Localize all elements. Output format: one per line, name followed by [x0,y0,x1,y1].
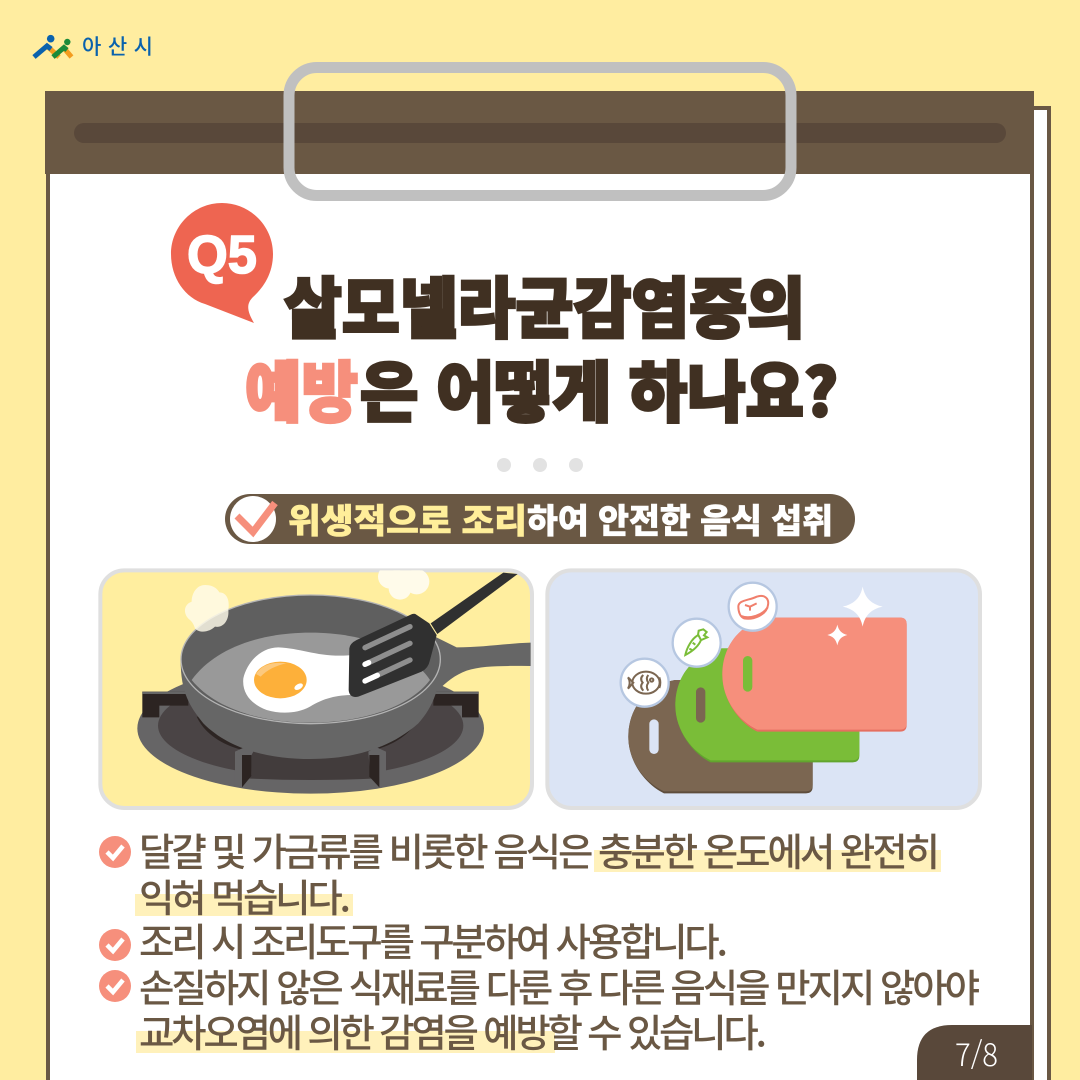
egg yolk [254,662,307,698]
panel: colour-coded cutting boards [547,570,980,808]
subtitle yellow text: 위생적으로 조리 [288,494,527,543]
pink cutting board [722,618,907,732]
bullet check 2 [99,929,131,961]
Q5 speech bubble [171,203,273,323]
green cutting board [675,648,859,762]
subtitle pill [225,494,855,544]
steam cloud right [378,570,430,600]
page number tab [917,1025,1032,1080]
clipboard header [45,91,1034,174]
icon: steak [729,583,777,631]
pan rim and walls [181,595,440,724]
pan body [181,660,441,759]
text line 3: 조리 시 조리도구를 구분하여 사용합니다. [139,912,728,968]
Q5 label: Q5 [187,225,257,285]
title line 2: 은 어떻게 하나요? [360,340,838,436]
subtitle white text: 하여 안전한 음식 섭취 [527,494,833,543]
title highlight word: 예방 [245,340,358,436]
title [245,256,838,436]
metal clip [289,68,791,196]
bullet check 3 [99,970,131,1002]
back sheet [1000,108,1049,1080]
highlight: line 1 [594,850,941,872]
logo: Asan city [34,31,153,61]
egg white [243,647,353,713]
text line 4: 손질하지 않은 식재료를 다룬 후 다른 음식을 만지지 않아야 [139,958,980,1014]
brown cutting board [628,680,813,793]
title line 1: 살모넬라균감염증의 [284,256,805,352]
text line 2: 익혀 먹습니다. [139,868,351,924]
text line 5: 교차오염에 의한 감염을 예방할 수 있습니다. [139,1003,767,1059]
frying pan [181,595,531,759]
icon: carrot [673,619,721,667]
grates [142,692,479,717]
spatula [349,573,518,697]
panel: frying egg on gas stove [100,558,532,808]
pan handle [435,637,531,686]
header slot [74,123,1006,143]
icon: fish [621,659,669,707]
body text list [99,822,980,1059]
icon: check circle [230,496,276,542]
highlight: line 5 [136,1031,555,1053]
icon: logo mark [34,35,72,57]
icon: sparkles [827,587,883,645]
highlight: line 2 [135,894,353,916]
paper [48,170,1032,1080]
logo wordmark: 아 산 시 [82,31,153,61]
page number: 7/8 [955,1030,998,1075]
pagination dots [497,458,583,472]
text line 1: 달걀 및 가금류를 비롯한 음식은 충분한 온도에서 완전히 [139,822,940,878]
steam clouds [185,585,229,632]
stove burner [137,684,484,794]
bullet check 1 [99,836,131,868]
